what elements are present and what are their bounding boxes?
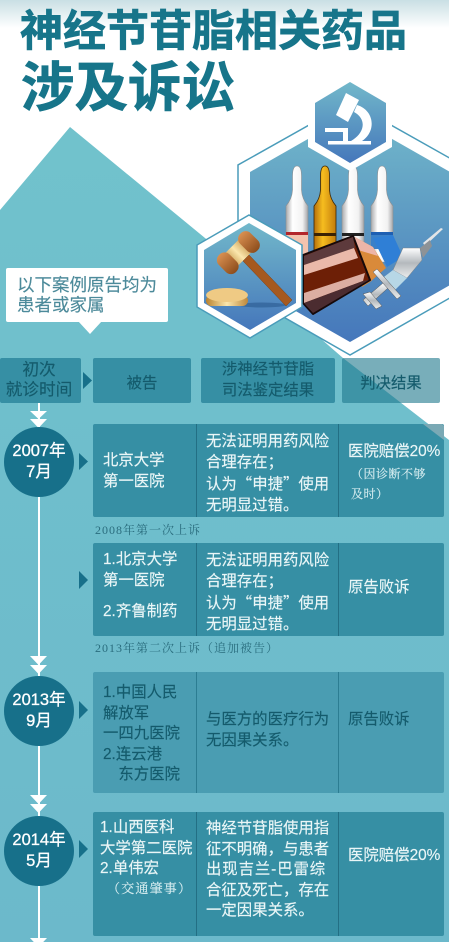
row 4 case: （交通肇事）	[107, 881, 192, 896]
icon: ampoules	[286, 166, 393, 263]
caption: first appeal: 2008年第一次上诉	[95, 523, 201, 537]
row 1 case: 第一医院	[103, 472, 165, 490]
header: defendant	[93, 358, 191, 403]
circle: 2007: 7月	[26, 463, 52, 481]
row 4 case	[93, 812, 444, 936]
row 3 case	[93, 672, 444, 793]
circle: 2007	[4, 427, 74, 497]
header: forensic result: 司法鉴定结果	[222, 382, 314, 398]
row 4 case: 征不明确，与患者	[206, 840, 329, 858]
callout text: 以下案例原告均为	[17, 275, 157, 295]
row 4 case: 出现吉兰-巴雷综	[206, 861, 326, 878]
circle: 2014: 2014年	[12, 831, 66, 849]
header: first visit time	[0, 358, 81, 403]
caption: second appeal: 2013年第二次上诉（追加被告）	[95, 641, 279, 655]
circle: 2013: 2013年	[12, 691, 66, 709]
callout box	[6, 268, 168, 334]
row 4 case: 合征及死亡，存在	[206, 882, 329, 898]
row 2 case: 合理存在；	[206, 572, 283, 590]
circle: 2014	[4, 816, 74, 886]
row 1 case: 合理存在；	[206, 454, 283, 470]
header: first visit time: 就诊时间	[6, 380, 72, 399]
header: verdict	[342, 358, 440, 403]
timeline arrows	[30, 411, 47, 942]
row 3 case: 一四九医院	[103, 725, 180, 742]
row 3 case: 原告败诉	[348, 711, 410, 728]
row 4 case: 1.山西医科	[100, 819, 174, 836]
circle: 2013	[4, 676, 74, 746]
row 2 case: 1.北京大学	[103, 551, 177, 568]
title: 神经节苷脂相关药品	[20, 8, 407, 56]
row 3 case: 与医方的医疗行为	[206, 711, 329, 728]
icon: microscope hexagon	[308, 75, 392, 171]
header: forensic result	[201, 358, 335, 403]
row 1 case: 及时）	[351, 486, 389, 500]
row 4 case: 一定因果关系。	[206, 902, 314, 919]
row 1 case: 无法证明用药风险	[206, 433, 329, 450]
row 1 case: 医院赔偿20%	[348, 443, 440, 460]
row 4 case: 医院赔偿20%	[348, 847, 440, 864]
icon: gavel	[206, 228, 292, 308]
row 1 case	[93, 424, 444, 517]
row 3 case: 2.连云港	[103, 746, 162, 762]
row 4 case: 神经节苷脂使用指	[206, 820, 329, 837]
callout text: 患者或家属	[17, 295, 104, 315]
header: first visit time: 初次	[22, 360, 56, 379]
header: forensic result: 涉神经节苷脂	[222, 361, 314, 378]
timeline vertical line	[38, 403, 40, 942]
row 2 case	[93, 543, 444, 636]
row arrows	[79, 372, 92, 858]
row 2 case: 无法证明用药风险	[206, 552, 329, 569]
icon: microscope	[325, 93, 372, 144]
title: 涉及诉讼	[21, 59, 235, 118]
row 1 case: 无明显过错。	[206, 496, 298, 514]
row 2 case: 原告败诉	[348, 579, 410, 596]
row 2 case: 2.齐鲁制药	[103, 603, 177, 620]
row 3 case: 东方医院	[118, 766, 180, 783]
icon: large hexagon with medicines	[238, 102, 449, 355]
row 1 case: 北京大学	[103, 452, 165, 469]
callout text	[17, 275, 157, 315]
row 3 case: 1.中国人民	[103, 684, 177, 701]
row 2 case: 认为“申捷”使用	[206, 591, 329, 613]
header: defendant: 被告	[127, 375, 157, 392]
row 3 case: 解放军	[103, 704, 149, 722]
row 2 case: 无明显过错。	[206, 616, 298, 632]
row 4 case: 2.单伟宏	[100, 860, 159, 877]
row 4 case: 大学第二医院	[100, 840, 192, 856]
row 3 case: 无因果关系。	[206, 732, 298, 748]
circle: 2014: 5月	[26, 852, 52, 870]
icon: gavel hexagon	[197, 215, 302, 338]
circle: 2013: 9月	[26, 712, 52, 730]
row 1 case: （因诊断不够	[351, 467, 426, 481]
icon: syringe	[363, 228, 443, 309]
row 2 case: 第一医院	[103, 572, 165, 588]
title	[20, 8, 407, 118]
header: verdict: 判决结果	[360, 375, 422, 392]
row 1 case: 认为“申捷”使用	[206, 472, 329, 494]
circle: 2007: 2007年	[12, 442, 66, 460]
icon: brown medicine bottle	[303, 235, 403, 314]
